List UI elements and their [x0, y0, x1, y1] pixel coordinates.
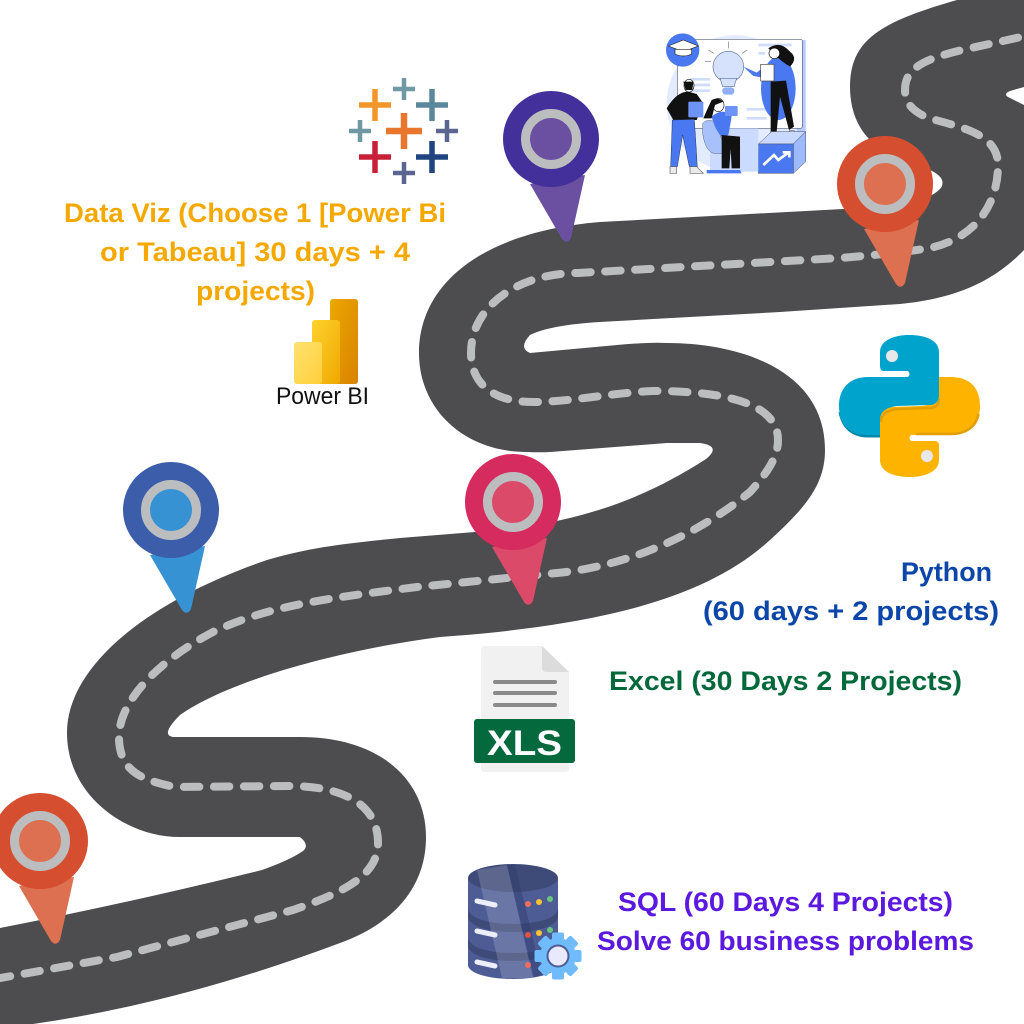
pin: start red [0, 793, 88, 944]
icon: xls file: XLS [487, 724, 562, 763]
heading: sql: SQL (60 Days 4 Projects) [618, 887, 953, 917]
icon: power bi logo [276, 299, 369, 410]
heading: excel: Excel (30 Days 2 Projects) [609, 666, 962, 696]
heading: data viz [64, 198, 446, 306]
icon: xls file [474, 646, 575, 772]
illustration: team with lightbulb [666, 33, 806, 173]
heading: python [703, 557, 999, 626]
heading: python: (60 days + 2 projects) [703, 596, 999, 626]
icon: database with gear [468, 864, 582, 980]
icon: power bi logo: Power BI [276, 383, 369, 410]
icon: tableau logo [349, 78, 458, 184]
heading: python: Python [901, 557, 992, 587]
pin: purple [503, 91, 599, 242]
pin: orange [837, 136, 933, 287]
icon: python logo [839, 335, 980, 477]
heading: sql: Solve 60 business problems [597, 926, 974, 956]
heading: data viz: projects) [196, 276, 315, 306]
pin: blue [123, 462, 219, 613]
pin: crimson [465, 454, 561, 605]
heading: data viz: or Tabeau] 30 days + 4 [100, 237, 410, 267]
heading: sql [597, 887, 974, 956]
heading: data viz: Data Viz (Choose 1 [Power Bi [64, 198, 446, 228]
